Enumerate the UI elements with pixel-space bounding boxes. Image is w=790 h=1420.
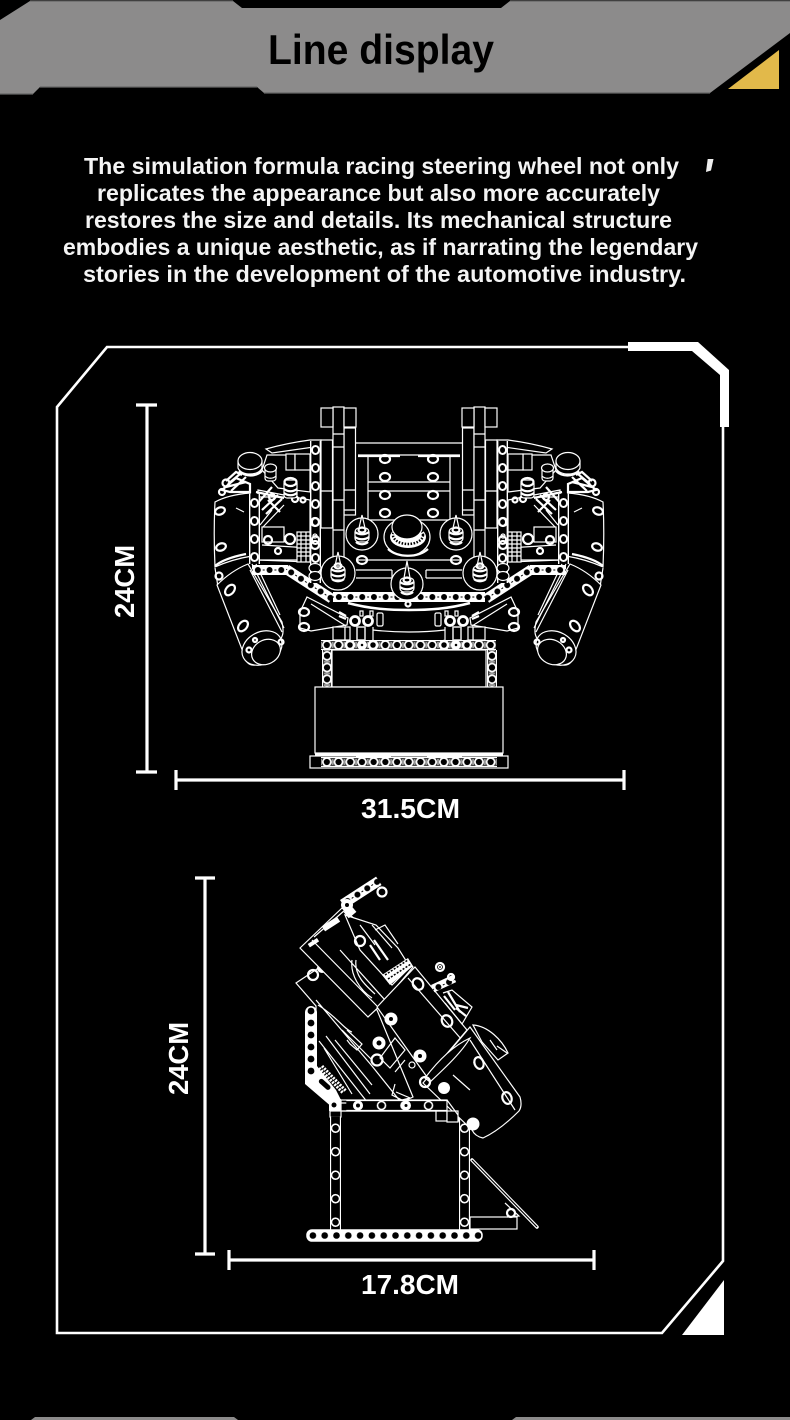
lever rod <box>470 1160 537 1229</box>
label 24CM: 24CM <box>109 545 140 618</box>
description text: The simulation formula racing steering wheel not only <box>84 153 679 179</box>
foot beam <box>307 1230 482 1241</box>
stand box <box>315 687 503 753</box>
lower beam row <box>333 592 409 602</box>
header gold triangle <box>728 50 779 89</box>
top dome <box>473 1025 508 1060</box>
centre dome knob <box>384 515 430 556</box>
side mechanism <box>258 490 310 562</box>
label 17.8CM: 17.8CM <box>361 1269 459 1300</box>
gear mesh <box>297 532 310 562</box>
stand base bar <box>310 753 508 768</box>
vertical grip beam <box>249 494 260 564</box>
stand inner frame <box>332 650 486 687</box>
stand upper beam <box>321 640 496 650</box>
hub disc upper <box>346 515 378 550</box>
stand posts <box>330 1111 470 1230</box>
label 24CM: 24CM <box>163 1022 194 1095</box>
upper grip plate <box>266 440 321 453</box>
description text: stories in the development of the automotive industry. <box>83 261 686 287</box>
description text: embodies a unique aesthetic, as if narrating the legendary <box>63 234 698 260</box>
lower bracket <box>300 597 348 631</box>
label 31.5CM: 31.5CM <box>361 793 460 824</box>
ratchet cluster <box>222 478 250 492</box>
upper mechanism <box>345 915 410 985</box>
central plate lines <box>356 443 409 520</box>
wheel right half (mirror) <box>409 407 604 672</box>
description text <box>63 153 698 287</box>
hub disc left <box>321 552 355 590</box>
stand left post <box>322 650 332 687</box>
frame thick corner <box>628 342 729 427</box>
header banner <box>0 1 790 94</box>
title: Line display <box>268 26 495 73</box>
description text: restores the size and details. Its mechanical structure <box>85 207 672 233</box>
lower grip <box>217 564 283 665</box>
front barrel <box>423 1027 521 1138</box>
top beam <box>340 877 382 908</box>
front view model: steering wheel <box>214 407 604 768</box>
vertical perforated beam <box>310 441 321 583</box>
dimension: front height <box>109 405 157 772</box>
left curved support beam <box>305 1006 346 1108</box>
frame white corner triangle <box>682 1280 724 1335</box>
upper grip <box>214 493 252 567</box>
plate holes <box>380 455 390 463</box>
dimension: front width <box>176 770 624 824</box>
top deck beam <box>346 1100 447 1111</box>
curved blade <box>425 1038 470 1082</box>
long bars <box>321 440 332 528</box>
top blocks <box>321 408 333 427</box>
centre lower hub <box>391 561 423 606</box>
wheel left half <box>214 407 409 672</box>
upper module <box>300 908 413 1017</box>
side view model <box>296 877 537 1241</box>
diagonal beam <box>252 565 288 575</box>
knobs <box>238 461 262 474</box>
stand right post <box>487 650 497 687</box>
dimension: side width <box>229 1250 594 1300</box>
panel frame <box>57 342 729 1335</box>
grip end cap <box>236 624 288 672</box>
deck corner blocks <box>436 1111 447 1121</box>
upper side beam <box>431 975 456 992</box>
dimension: side height <box>163 878 215 1254</box>
bottom banner strip <box>31 1417 790 1420</box>
lower module <box>296 965 413 1103</box>
description text: replicates the appearance but also more accurately <box>97 180 660 206</box>
fan section <box>443 990 472 1024</box>
stray apostrophe mark <box>706 159 714 172</box>
central body <box>377 967 467 1077</box>
central connector <box>333 611 383 640</box>
